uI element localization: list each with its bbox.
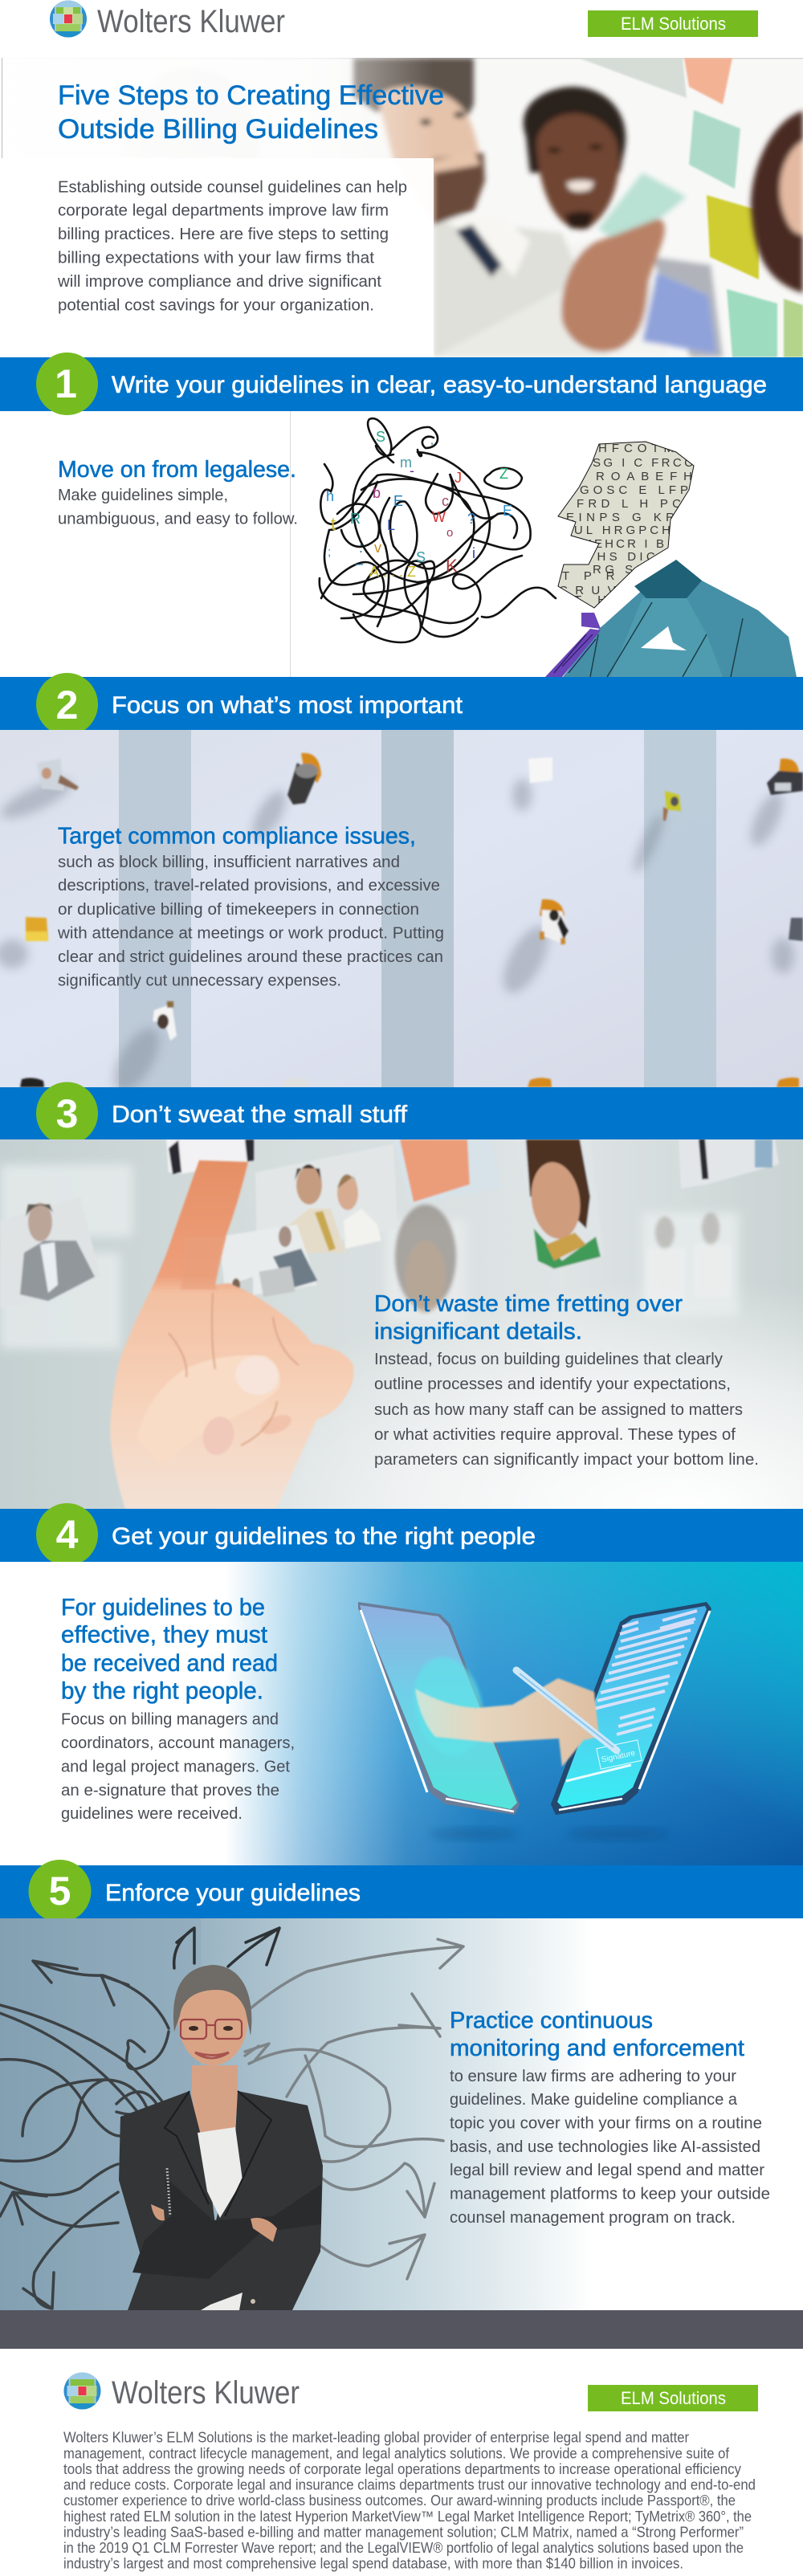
illustration: man made of letters: GOSC E LFP	[580, 483, 688, 497]
step 4 text: coordinators, account managers,	[61, 1734, 295, 1752]
illustration: tangled speech scribble: b	[373, 485, 381, 501]
hero title	[58, 80, 444, 145]
step 4 text: and legal project managers. Get	[61, 1758, 290, 1776]
step 3 text: such as how many staff can be assigned to matters	[374, 1400, 743, 1419]
illustration: tangled speech scribble: m	[400, 454, 412, 471]
footer about text: Wolters Kluwer’s ELM Solutions is the market-leading global provider of enterprise legal spend and matter	[63, 2430, 689, 2446]
panel: step 1 legalese	[58, 411, 797, 677]
right phone: Signature	[601, 1749, 636, 1765]
step 5 banner: 5	[49, 1869, 71, 1914]
step 5 text: legal bill review and legal spend and matter	[450, 2161, 764, 2179]
step 3 text: insignificant details.	[374, 1319, 582, 1345]
illustration: man made of letters: CHEHCR I B	[572, 537, 664, 551]
signed document lines	[594, 1611, 697, 1734]
icon: globe	[50, 0, 87, 38]
step 1 banner: Write your guidelines in clear, easy-to-understand language	[112, 372, 767, 398]
footer about text: industry’s leading SaaS-based e-billing and matter management solution; CLM Matrix, named a “Strong Performer”	[63, 2525, 744, 2541]
illustration: tangled speech scribble: L	[387, 517, 395, 533]
illustration: man made of letters: ROABEFH	[596, 470, 692, 483]
panel: step 2 photo of people from above	[0, 730, 803, 1098]
illustration: tangled speech scribble: S	[376, 429, 385, 445]
illustration: tangled speech scribble: v	[374, 540, 381, 556]
illustration: tangled speech scribble: ;	[328, 545, 331, 559]
badge: ELM Solutions	[588, 10, 758, 37]
step 5 banner	[0, 1860, 803, 1922]
step 2 text	[57, 824, 444, 990]
step 2 text: Target common compliance issues,	[58, 824, 416, 850]
footer about text: customer experience to drive world-class business outcomes. Our award-winning products include Passport®, the	[63, 2492, 736, 2509]
illustration: man made of letters: SG I C FRCC	[593, 456, 693, 470]
illustration: man made of letters: EINPS G KR	[566, 511, 675, 524]
step 3 banner	[0, 1082, 803, 1145]
illustration: tangled speech scribble: _	[354, 549, 364, 566]
footer about text: management, contract lifecycle management, and legal analytics solutions. We provide a comprehensive suite of	[63, 2446, 730, 2462]
step 5 text: to ensure law firms are adhering to your	[450, 2067, 736, 2085]
shadows	[0, 772, 794, 1098]
footer about text: highest rated ELM solution in the latest Hyperion MarketView™ Legal Market Intelligence Report; TyMetrix® 360°, the	[63, 2509, 752, 2525]
footer about text: in the 2019 Q1 CLM Forrester Wave report; and the LegalVIEW® portfolio of legal analytics solutions based upon the	[63, 2540, 744, 2556]
badge: ELM Solutions footer: ELM Solutions	[621, 2388, 726, 2408]
left phone	[358, 1602, 520, 1815]
pocket square	[641, 626, 687, 650]
step 3 text: Don’t waste time fretting over	[374, 1291, 683, 1317]
step 3 banner: 3	[56, 1091, 78, 1136]
illustration: tangled speech scribble: t	[331, 514, 336, 534]
hero title: Five Steps to Creating Effective	[58, 80, 444, 111]
illustration: man made of letters	[545, 442, 797, 677]
illustration: tangled speech scribble: S	[416, 549, 426, 565]
step 5 banner: Enforce your guidelines	[105, 1880, 361, 1906]
illustration: tangled speech scribble: J	[454, 470, 462, 486]
step 2 banner: 2	[56, 683, 78, 728]
step 2 text: such as block billing, insufficient narratives and	[58, 853, 400, 871]
illustration: tangled speech scribble: E	[393, 493, 403, 509]
illustration: tangled speech scribble: R	[350, 511, 361, 527]
panel: step 4 phones with e-signature	[0, 1562, 803, 1865]
footer about text: tools that address the growing needs of corporate legal operations departments to increase operational efficiency	[63, 2461, 741, 2477]
illustration: tangled speech scribble: ?	[467, 511, 475, 527]
step 2 text: descriptions, travel-related provisions, and excessive	[58, 876, 440, 895]
phone shadows	[430, 1828, 671, 1840]
step 4 banner: 4	[56, 1512, 79, 1557]
heading: Move on from legalese.	[58, 457, 296, 483]
step 4 text: effective, they must	[61, 1622, 268, 1649]
wordmark: Wolters Kluwer	[97, 4, 285, 39]
hero intro text: will improve compliance and drive significant	[57, 272, 381, 291]
illustration: tangled speech scribble: -	[410, 463, 414, 479]
hero intro text: potential cost savings for your organization.	[58, 296, 374, 315]
step 1 banner	[0, 353, 803, 415]
step 2 text: with attendance at meetings or work product. Putting	[57, 924, 444, 943]
jacket	[563, 560, 797, 677]
illustration: man made of letters: DUL HRGPCH	[562, 524, 671, 537]
footer about text	[63, 2430, 756, 2572]
body text: Make guidelines simple,	[58, 486, 228, 504]
step 3 text: parameters can significantly impact your bottom line.	[374, 1450, 759, 1469]
step 5 text: guidelines. Make guideline compliance a	[450, 2090, 738, 2109]
panel: step 3 photo of finger selecting people	[0, 1139, 803, 1509]
illustration: tangled speech scribble: A...Z	[369, 564, 416, 580]
illustration: man made of letters: RG SUV	[593, 563, 657, 577]
step 2 text: clear and strict guidelines around these practices can	[58, 948, 443, 966]
illustration: man made of letters: HFCOTMK	[598, 442, 687, 455]
step 4 text: Focus on billing managers and	[61, 1710, 279, 1729]
hand-drawn arrows	[0, 1928, 279, 2309]
hero intro text: billing practices. Here are five steps to setting	[58, 225, 389, 243]
shirt collar	[594, 548, 676, 624]
step 3 text: outline processes and identify your expectations,	[374, 1375, 731, 1393]
illustration: tangled speech scribble: c	[442, 493, 449, 509]
step 5 text: management platforms to keep your outside	[450, 2185, 770, 2203]
illustration: tangled speech scribble: K	[446, 556, 458, 576]
seated people and chairs	[20, 753, 803, 1087]
step 3 text	[374, 1291, 759, 1469]
body text	[58, 486, 298, 528]
woman	[119, 1965, 323, 2310]
body text: unambiguous, and easy to follow.	[58, 510, 298, 528]
step 3 text: Instead, focus on building guidelines that clearly	[374, 1350, 724, 1368]
badge: ELM Solutions: ELM Solutions	[621, 14, 726, 34]
step 1 banner: 1	[55, 361, 77, 406]
illustration: tangled speech scribble: W	[432, 509, 446, 525]
hand	[110, 1160, 353, 1509]
step 4 banner: Get your guidelines to the right people	[112, 1523, 536, 1550]
step 4 text: by the right people.	[61, 1678, 263, 1705]
step 2 banner: Focus on what’s most important	[112, 692, 463, 719]
illustration: man made of letters: TH	[574, 593, 606, 607]
illustration: tangled speech scribble	[320, 418, 556, 642]
head of letters	[558, 442, 694, 608]
illustration: man made of letters: FRD L H PC	[577, 497, 681, 511]
step 5 text: topic you cover with your firms on a routine	[450, 2114, 762, 2133]
step 4 text: be received and read	[61, 1650, 278, 1677]
right phone	[551, 1602, 711, 1815]
footer about text: industry’s largest and most comprehensive legal spend database, with more than $140 billion in invoices.	[63, 2556, 683, 2572]
tie	[581, 613, 601, 629]
step 2 banner	[0, 673, 803, 736]
step 2 text: or duplicative billing of timekeepers in connection	[58, 900, 419, 919]
illustration: tangled speech scribble: :	[359, 540, 363, 556]
panel: step 5 woman with arrows	[0, 1918, 570, 2310]
step 5 text: Practice continuous	[450, 2008, 653, 2034]
step 2 text: significantly cut unnecessary expenses.	[58, 972, 341, 990]
people cards	[0, 1139, 779, 1309]
hero intro text: Establishing outside counsel guidelines can help	[58, 178, 407, 196]
illustration: tangled speech scribble: Z	[499, 466, 508, 482]
step 5 text: basis, and use technologies like AI-assisted	[450, 2138, 760, 2156]
footer logo: Wolters Kluwer	[64, 2372, 300, 2411]
step 4 text: an e-signature that proves the	[61, 1781, 279, 1800]
badge: ELM Solutions footer	[588, 2385, 758, 2411]
step 5 text: counsel management program on track.	[450, 2208, 736, 2227]
illustration: man made of letters: CRUVE	[559, 584, 631, 597]
blurred panels	[0, 1164, 739, 1349]
illustration: tangled speech scribble: h	[326, 488, 334, 504]
illustration: tangled speech scribble: E	[503, 503, 512, 519]
footer about text: and reduce costs. Corporate legal and insurance claims departments trust our innovative technology and end-to-end	[63, 2477, 756, 2493]
thumb	[147, 1355, 279, 1415]
hero photo: team with sticky notes	[0, 58, 803, 357]
step 3 banner: Don’t sweat the small stuff	[112, 1102, 408, 1128]
step 4 banner	[0, 1503, 803, 1566]
hero title: Outside Billing Guidelines	[58, 114, 378, 145]
illustration: tangled speech scribble: i	[472, 545, 475, 561]
wordmark: Wolters Kluwer	[112, 2375, 300, 2411]
icon: globe	[64, 2372, 101, 2410]
illustration: tangled speech scribble: ,	[430, 434, 434, 446]
step 4 text: For guidelines to be	[61, 1595, 265, 1621]
illustration: tangled speech scribble: o	[446, 526, 453, 540]
dark divider band	[0, 2310, 803, 2349]
step 4 text: guidelines were received.	[61, 1804, 243, 1823]
hero intro text	[57, 178, 407, 315]
hand holding stylus	[415, 1670, 617, 1767]
header logo: Wolters Kluwer	[50, 0, 285, 39]
hero intro text: corporate legal departments improve law firm	[58, 202, 389, 220]
step 5 text: monitoring and enforcement	[450, 2036, 744, 2061]
illustration: man made of letters: TPRCL	[562, 569, 658, 583]
hero intro text: billing expectations with your law firms that	[58, 249, 374, 267]
step 3 text: or what activities require approval. These types of	[374, 1425, 736, 1444]
illustration: man made of letters: THS DICE	[586, 550, 666, 564]
step 4 text	[61, 1595, 295, 1823]
step 5 text	[450, 2008, 770, 2227]
